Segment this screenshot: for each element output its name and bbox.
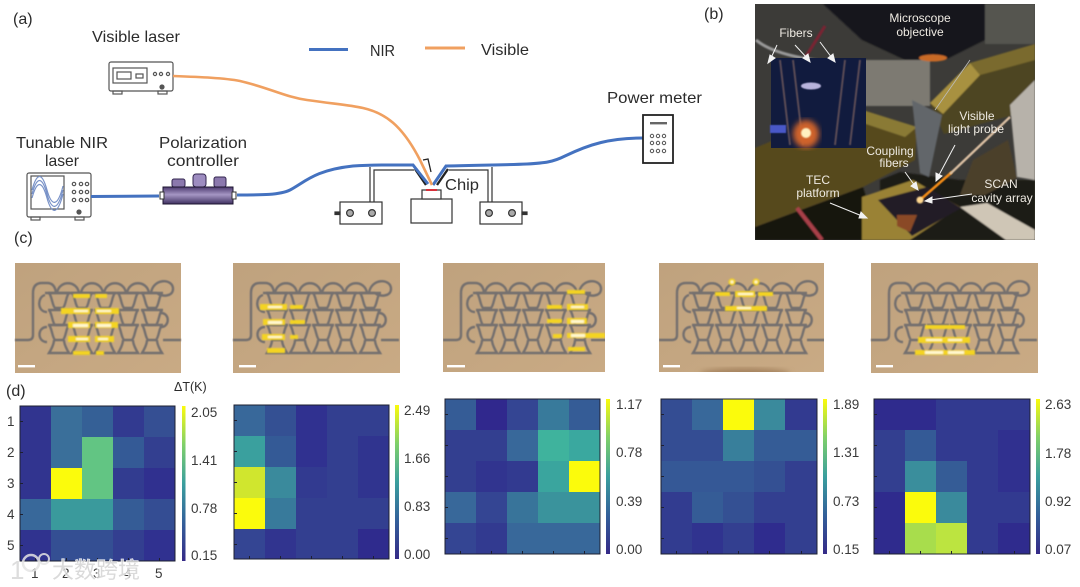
heatmap 2 <box>234 403 430 562</box>
icon: tunable NIR laser: laser <box>45 153 80 170</box>
icon: visible laser: Visible laser <box>92 29 181 46</box>
heatmap 3 <box>445 397 642 557</box>
heatmap 1: 4 <box>7 507 15 522</box>
icon: power meter <box>607 90 703 163</box>
icon: polarization controller <box>159 135 247 204</box>
heatmap 4 <box>661 397 859 557</box>
panel label: (a): (a) <box>13 11 33 28</box>
heatmap 1: 2 <box>62 566 70 581</box>
heatmap 2: 0.83 <box>404 499 430 514</box>
watermark: 大数跨境 <box>52 558 140 583</box>
micrograph 3 <box>443 263 609 372</box>
fibre stage: right <box>437 167 527 224</box>
watermark <box>10 554 140 585</box>
photo annotations: labels and arrows: Coupling <box>866 144 914 158</box>
heatmap 1: 0.78 <box>191 501 217 516</box>
heatmap 5: 1.78 <box>1045 446 1071 461</box>
heatmap 1: 4 <box>124 566 132 581</box>
heatmap 1: 3 <box>7 476 15 491</box>
photo annotations: labels and arrows: platform <box>796 186 840 200</box>
fibre: NIR from chip to power meter <box>433 138 643 185</box>
icon: polarization controller: Polarization <box>159 135 247 152</box>
watermark: 1 <box>10 555 24 585</box>
chip on mount: Chip <box>445 177 479 194</box>
heatmap 1: 5 <box>7 538 15 553</box>
photo annotations: labels and arrows: Microscope <box>889 11 951 25</box>
legend: NIR and visible fibres: Visible <box>481 42 529 59</box>
heatmap 3: 1.17 <box>616 397 642 412</box>
heatmap 1: 5 <box>155 566 163 581</box>
chip on mount <box>411 159 479 223</box>
heatmap 1: 2.05 <box>191 405 217 420</box>
fibre: NIR laser to polarization controller <box>91 194 159 198</box>
heatmap 1: 1 <box>31 566 39 581</box>
photo annotations: labels and arrows: Visible <box>959 109 995 123</box>
legend: NIR and visible fibres: NIR <box>370 43 395 60</box>
photo annotations: labels and arrows: TEC <box>806 173 830 187</box>
heatmap 1: 3 <box>93 566 101 581</box>
fibre stage: left <box>335 167 426 224</box>
panel label: (d): (d) <box>6 383 26 400</box>
photo annotations: labels and arrows: fibers <box>879 156 909 170</box>
heatmap 4: 1.31 <box>833 445 859 460</box>
photo annotations: labels and arrows <box>768 11 1033 218</box>
heatmap 4: 0.73 <box>833 494 859 509</box>
icon: tunable NIR laser <box>16 135 108 220</box>
micrograph 1 <box>15 263 181 373</box>
photo annotations: labels and arrows: light probe <box>948 122 1004 136</box>
photo annotations: labels and arrows: SCAN <box>984 177 1018 191</box>
legend: NIR and visible fibres <box>309 42 529 60</box>
micrograph 5 <box>871 263 1038 373</box>
fibre: NIR from controller to chip <box>237 165 428 195</box>
heatmap 5 <box>874 397 1071 557</box>
heatmap 2: 2.49 <box>404 403 430 418</box>
heatmap 1: 2 <box>7 445 15 460</box>
heatmap 5: 2.63 <box>1045 397 1071 412</box>
heatmap 1: 1.41 <box>191 453 217 468</box>
heatmap 4: 1.89 <box>833 397 859 412</box>
heatmap 1: 1 <box>7 414 15 429</box>
heatmap 5: 0.07 <box>1045 542 1071 557</box>
heatmap 5: 0.92 <box>1045 494 1071 509</box>
icon: polarization controller: controller <box>167 153 240 170</box>
heatmap 1 <box>7 405 217 581</box>
icon: visible laser <box>92 29 181 94</box>
fibre: visible laser to chip <box>173 76 432 185</box>
photo annotations: labels and arrows: cavity array <box>971 191 1033 205</box>
photo annotations: labels and arrows: Fibers <box>779 26 813 40</box>
heatmap 2: 0.00 <box>404 547 430 562</box>
panel label: (b): (b) <box>704 6 724 23</box>
micrograph 4 <box>659 263 825 380</box>
heatmap 2: 1.66 <box>404 451 430 466</box>
heatmap 3: 0.00 <box>616 542 642 557</box>
micrograph 2 <box>233 263 400 373</box>
heatmap 1: 0.15 <box>191 548 217 563</box>
heatmap 4: 0.15 <box>833 542 859 557</box>
icon: power meter: Power meter <box>607 90 703 107</box>
colorbar title: ΔT(K) <box>174 380 207 394</box>
panel label: (c): (c) <box>14 230 33 247</box>
icon: tunable NIR laser: Tunable NIR <box>16 135 108 152</box>
heatmap 3: 0.78 <box>616 445 642 460</box>
photo panel: experimental setup <box>755 4 1035 240</box>
heatmap 3: 0.39 <box>616 494 642 509</box>
photo annotations: labels and arrows: objective <box>896 25 944 39</box>
